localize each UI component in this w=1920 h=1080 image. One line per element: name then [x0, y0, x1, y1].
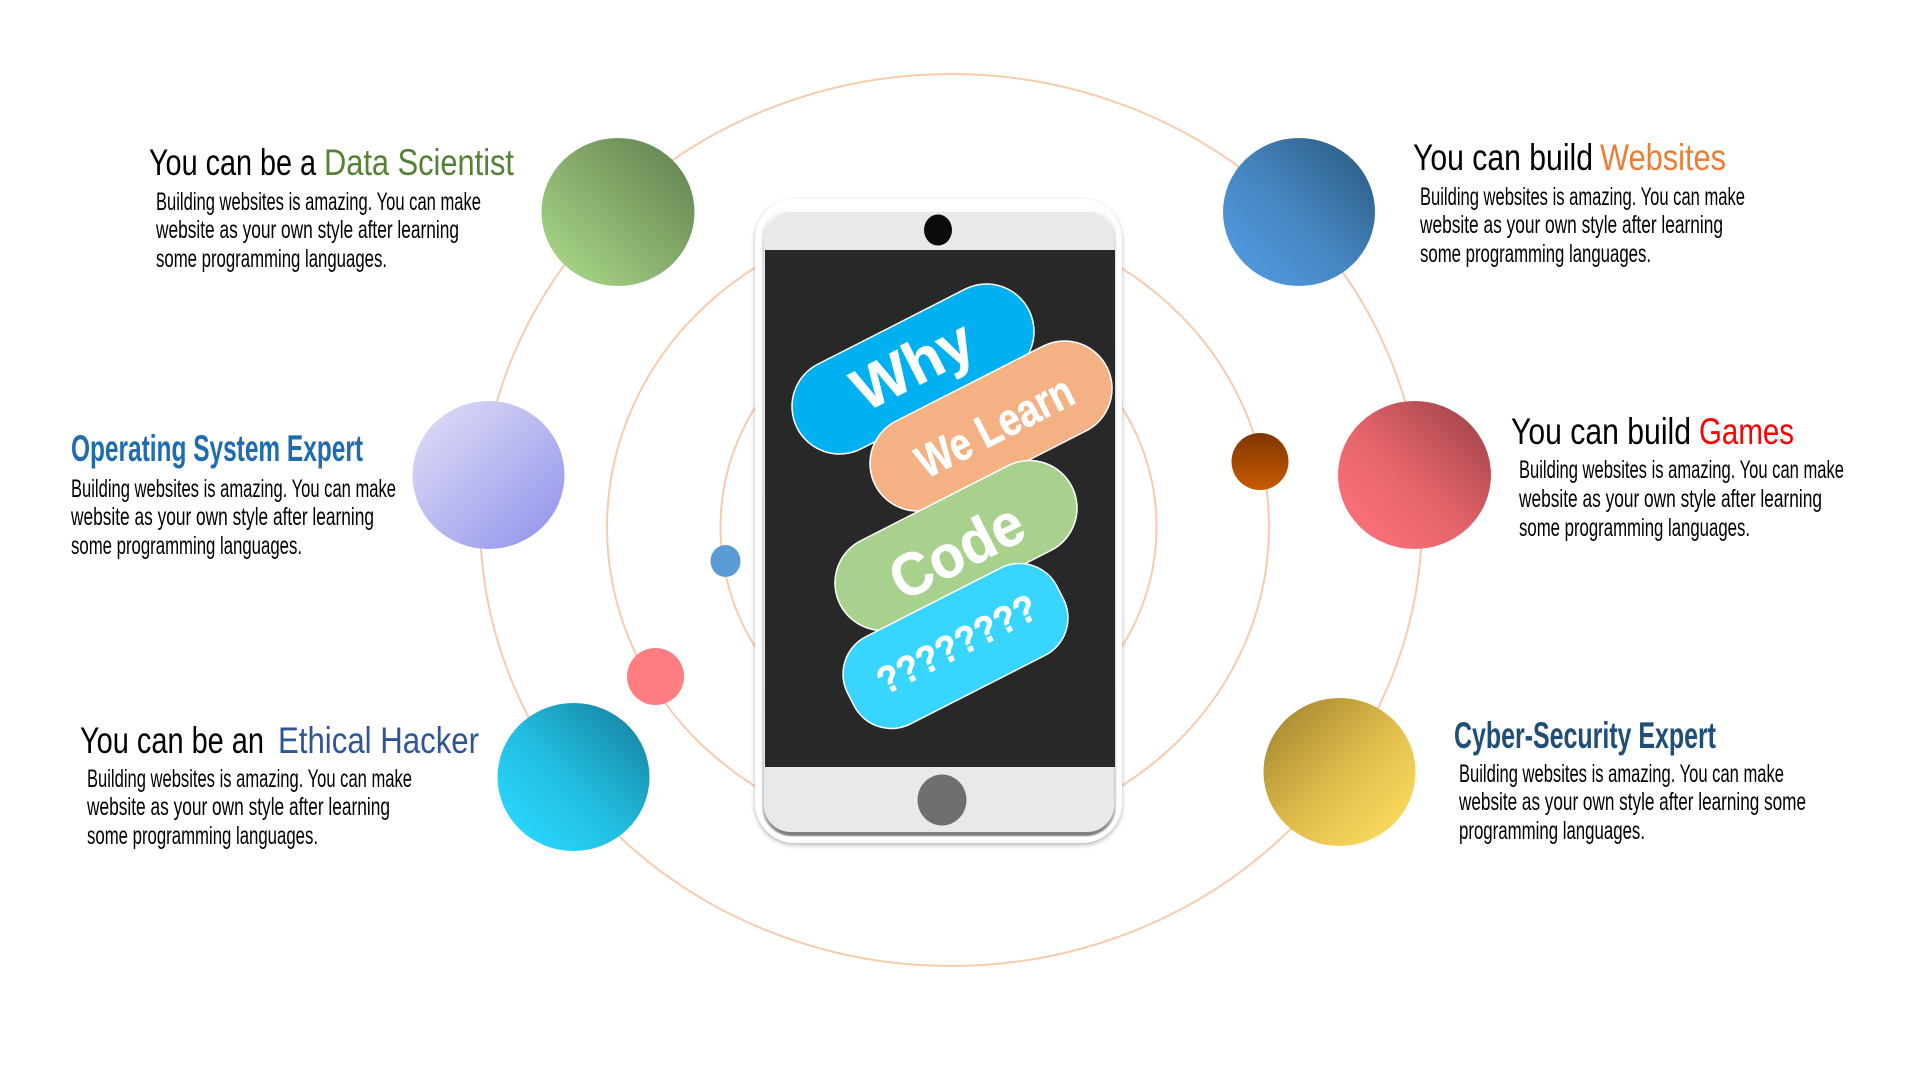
body: website as your own style after learning [70, 503, 374, 531]
orbit rings [480, 74, 1422, 966]
body: Building websites is amazing. You can make [71, 475, 396, 503]
heading: Data Scientist [324, 142, 515, 183]
body: some programming languages. [1519, 514, 1750, 542]
pill: We Learn: We Learn [907, 365, 1082, 488]
body: some programming languages. [1420, 240, 1651, 268]
body [1518, 456, 1844, 542]
body: some programming languages. [87, 822, 318, 850]
pill: Why [776, 268, 1050, 470]
pill: question marks [829, 549, 1082, 743]
heading: You can build [1413, 137, 1593, 178]
text block: Websites [1413, 137, 1745, 268]
body [1458, 760, 1806, 845]
body: Building websites is amazing. You can make [87, 765, 412, 793]
body: website as your own style after learning [155, 216, 459, 244]
body [155, 188, 481, 273]
body [86, 765, 412, 850]
pill: Code [819, 444, 1093, 647]
heading: You can be an [80, 720, 264, 761]
phone screen [765, 250, 1115, 767]
phone bezel [762, 207, 1116, 836]
heading: Websites [1600, 137, 1726, 178]
text block: Cyber-Security Expert [1454, 715, 1806, 845]
heading: Cyber-Security Expert [1454, 715, 1716, 756]
heading: Operating System Expert [71, 428, 363, 469]
heading: You can be a [149, 142, 316, 183]
pill: question marks: ???????? [870, 587, 1044, 703]
pill: Code: Code [878, 489, 1035, 613]
phone body [755, 199, 1122, 843]
body: Building websites is amazing. You can make [156, 188, 481, 216]
text block: Operating System Expert [70, 428, 396, 560]
text block: Ethical Hacker [80, 720, 479, 850]
body: website as your own style after learning [1419, 211, 1723, 239]
body [1419, 183, 1745, 268]
node: operating system circle [412, 401, 564, 549]
phone [755, 199, 1128, 843]
small dot: blue [710, 545, 740, 577]
heading: You can build [1511, 411, 1691, 452]
body: Building websites is amazing. You can make [1420, 183, 1745, 211]
node: games circle [1338, 401, 1491, 549]
heading: Games [1699, 411, 1794, 452]
body [70, 475, 396, 560]
node: websites circle [1223, 138, 1375, 286]
body: some programming languages. [71, 532, 302, 560]
phone home button [918, 774, 966, 826]
small dot: pink [627, 648, 684, 705]
phone camera [924, 214, 952, 246]
pill: Why: Why [841, 306, 985, 424]
body: some programming languages. [156, 245, 387, 273]
node: data scientist circle [542, 138, 694, 286]
heading: Ethical Hacker [278, 720, 479, 761]
node: ethical hacker circle [498, 703, 650, 851]
small dot: brown [1232, 433, 1288, 490]
body: website as your own style after learning [86, 793, 390, 821]
text block: Data Scientist [149, 142, 515, 273]
body: programming languages. [1459, 817, 1645, 845]
text block: Games [1511, 411, 1844, 542]
pill: We Learn [854, 325, 1128, 527]
node: cyber-security circle [1264, 698, 1416, 846]
